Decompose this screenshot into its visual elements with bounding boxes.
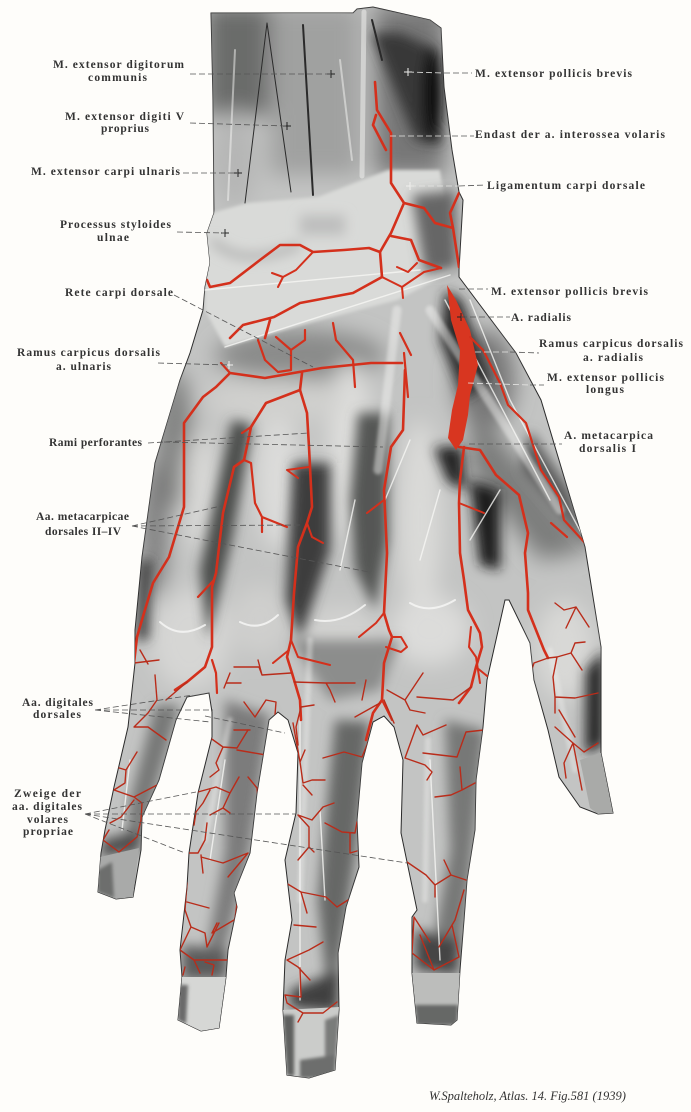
label: Aa. digitales dorsales: Aa. digitales [22, 697, 94, 709]
finger side shading [205, 700, 270, 960]
label: Zweige der aa. digitales volares propriae: aa. digitales [12, 801, 83, 813]
label: Ramus carpicus dorsalis a. ulnaris [17, 347, 229, 373]
wrist ligament band [205, 170, 455, 347]
label: M. extensor pollicis longus [468, 372, 665, 396]
label: Ramus carpicus dorsalis a. radialis: Ramus carpicus dorsalis [539, 338, 684, 350]
label: M. extensor digiti V proprius: proprius [101, 123, 150, 135]
label: M. extensor carpi ulnaris: M. extensor carpi ulnaris [31, 166, 181, 178]
label: Rami perforantes: Rami perforantes [49, 437, 143, 449]
label: Zweige der aa. digitales volares propriae: Zweige der [14, 788, 81, 800]
forearm tendons [245, 23, 291, 203]
label: M. extensor pollicis brevis, middle: M. extensor pollicis brevis [491, 286, 649, 298]
label: M. extensor digiti V proprius: M. extensor digiti V [65, 111, 185, 123]
label: Aa. digitales dorsales: dorsales [33, 709, 82, 721]
label: Endast der a. interossea volaris: Endast der a. interossea volaris [475, 129, 666, 141]
label: Aa. digitales dorsales [22, 695, 285, 733]
label: A. metacarpica dorsalis I [469, 430, 653, 455]
label: Ramus carpicus dorsalis a. radialis [475, 338, 684, 364]
label: M. extensor pollicis longus: M. extensor pollicis [547, 372, 665, 384]
label: A. radialis: A. radialis [511, 312, 572, 324]
hand illustration [98, 5, 613, 1078]
label: A. radialis [461, 312, 572, 324]
label: Ramus carpicus dorsalis a. ulnaris: Ramus carpicus dorsalis [17, 347, 161, 359]
label: Rete carpi dorsale [65, 287, 313, 367]
label: Rami perforantes [49, 433, 383, 449]
label: Aa. metacarpicae dorsales II-IV: Aa. metacarpicae [36, 511, 129, 523]
arteries of the fingers [103, 603, 598, 1022]
label: Ramus carpicus dorsalis a. radialis: a. radialis [583, 352, 644, 364]
label: Processus styloides ulnae: ulnae [97, 232, 129, 244]
arteries of wrist and back of hand [134, 82, 585, 740]
label: Processus styloides ulnae [60, 219, 225, 244]
label: Zweige der aa. digitales volares propriae: propriae [23, 826, 73, 838]
label: A. metacarpica dorsalis I: A. metacarpica [564, 430, 653, 442]
label: Rete carpi dorsale: Rete carpi dorsale [65, 287, 173, 299]
label: Zweige der aa. digitales volares propriae [12, 788, 407, 863]
nail ends [98, 848, 139, 899]
label: Zweige der aa. digitales volares propriae: volares [27, 814, 69, 826]
label: M. extensor pollicis longus: longus [586, 384, 625, 396]
dark gaps [200, 420, 252, 640]
source citation: W.Spalteholz, Atlas. 14. Fig.581 (1939) [429, 1089, 626, 1103]
label: M. extensor digitorum communis: communis [88, 72, 148, 84]
label: Ramus carpicus dorsalis a. ulnaris: a. ulnaris [56, 361, 112, 373]
label: Aa. metacarpicae dorsales II-IV: dorsales II–IV [45, 526, 122, 538]
label: Aa. metacarpicae dorsales II-IV [36, 506, 369, 572]
label: M. extensor digitorum communis: M. extensor digitorum [53, 59, 184, 71]
label: M. extensor pollicis brevis, top: M. extensor pollicis brevis [475, 68, 633, 80]
label: M. extensor digitorum communis [53, 59, 331, 84]
label: Processus styloides ulnae: Processus styloides [60, 219, 172, 231]
radial artery trunk [447, 285, 478, 450]
label: M. extensor digiti V proprius [65, 111, 287, 135]
small crosses on structures [225, 68, 414, 369]
label: A. metacarpica dorsalis I: dorsalis I [579, 443, 637, 455]
label: Ligamentum carpi dorsale: Ligamentum carpi dorsale [487, 180, 645, 192]
